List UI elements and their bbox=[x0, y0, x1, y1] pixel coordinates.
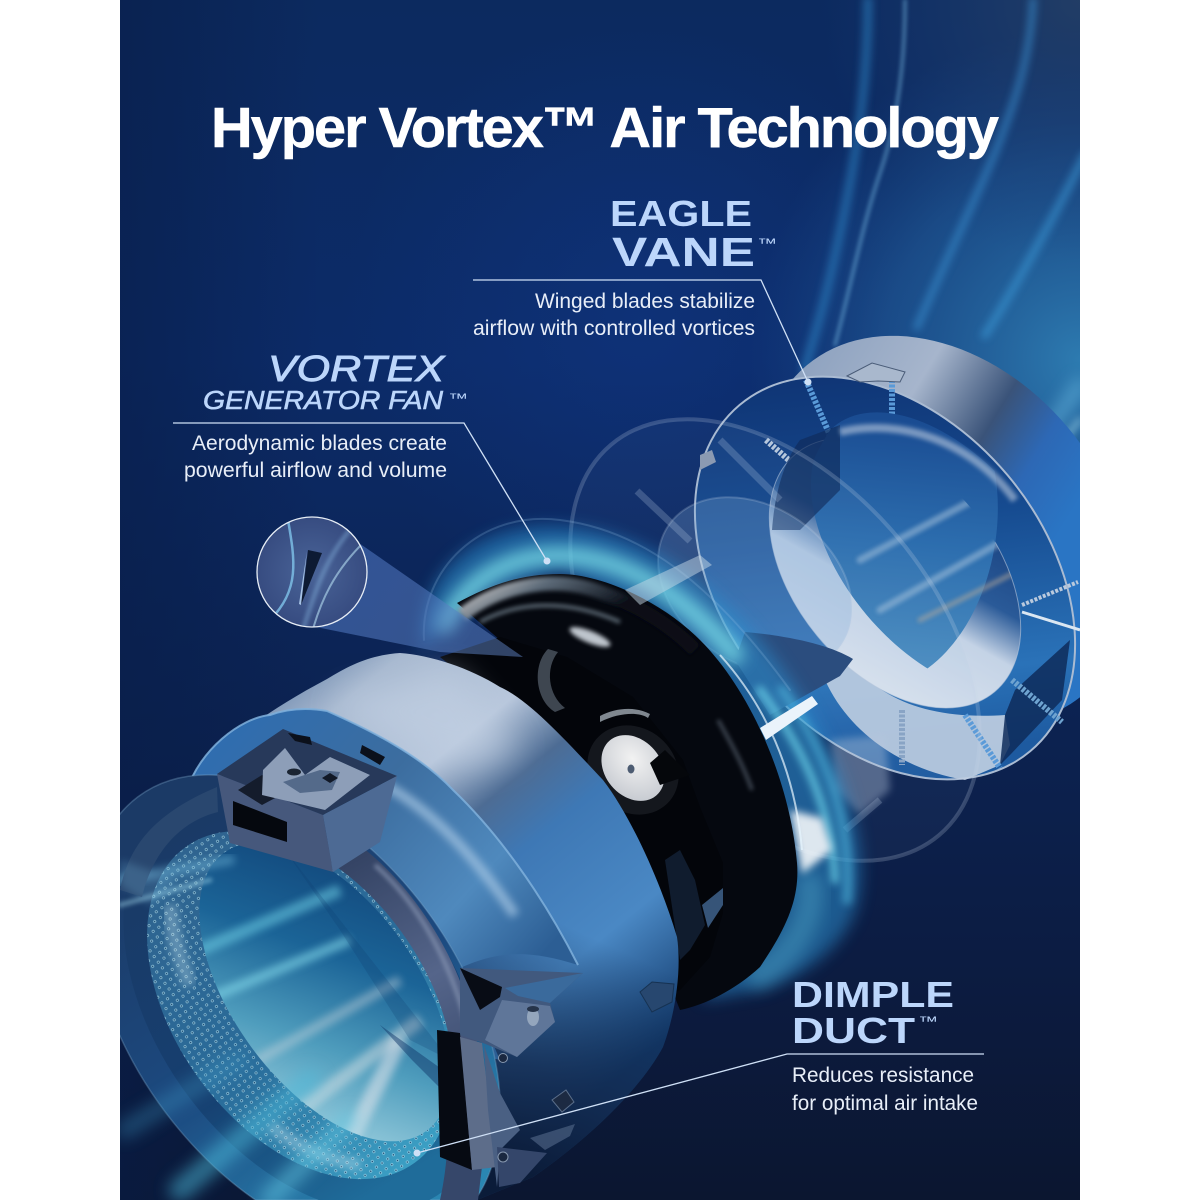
panel background gradient bbox=[120, 0, 1080, 1200]
dimple highlights bbox=[170, 905, 190, 985]
metal ring band bbox=[339, 850, 482, 1200]
inner tube opening bbox=[814, 412, 998, 668]
inner tube crescent bbox=[768, 440, 1022, 708]
lower translucent silver blade bbox=[830, 735, 890, 815]
description: vortex fan: Aerodynamic blades create bbox=[192, 431, 447, 455]
leader line: eagle vane bbox=[473, 280, 812, 386]
description: vortex fan: powerful airflow and volume bbox=[184, 458, 447, 482]
rim light line bbox=[720, 655, 802, 850]
lower silver petals bbox=[825, 660, 1010, 780]
heading: vortex generator fan bbox=[203, 348, 468, 415]
callout: vortex generator fan bbox=[173, 348, 550, 564]
translucent inner disc bbox=[657, 496, 852, 665]
mounting tab bbox=[847, 363, 905, 382]
ring highlight bbox=[373, 862, 460, 1014]
callout: dimple duct bbox=[414, 974, 984, 1156]
title: Hyper Vortex™ Air Technology bbox=[211, 96, 999, 160]
leader line: vortex fan bbox=[173, 423, 550, 564]
translucent spokes bbox=[637, 440, 880, 830]
side strut bbox=[484, 1045, 520, 1187]
small bracket bbox=[700, 450, 716, 470]
serrated blades bbox=[766, 380, 1080, 768]
tube top highlight bbox=[840, 428, 1015, 500]
gasket silver highlight bbox=[462, 584, 695, 650]
hub bbox=[588, 726, 678, 814]
black gasket ring bbox=[457, 555, 818, 1010]
left flange bracket bbox=[120, 787, 218, 905]
streaks through tube bbox=[855, 499, 1012, 624]
leader line: dimple duct bbox=[414, 1054, 984, 1156]
heading: eagle vane: EAGLE bbox=[610, 193, 752, 234]
heading: vortex generator fan: ™ bbox=[448, 390, 468, 406]
description: vortex fan bbox=[184, 431, 447, 482]
heading: eagle vane: VANE bbox=[612, 229, 755, 275]
translucent spoke strip bbox=[625, 555, 712, 605]
heading: eagle vane bbox=[610, 193, 777, 275]
rear eagle vane assembly bbox=[568, 336, 1080, 863]
white spoke strip bbox=[760, 696, 818, 740]
description: dimple duct: for optimal air intake bbox=[792, 1091, 978, 1115]
airflow wisps top right bbox=[798, 0, 1080, 437]
heading: dimple duct: DUCT bbox=[792, 1010, 915, 1051]
heading: dimple duct: DIMPLE bbox=[792, 974, 954, 1015]
airflow rays lower left bbox=[120, 860, 350, 1198]
description: dimple duct: Reduces resistance bbox=[792, 1063, 974, 1087]
small housing tab bbox=[640, 982, 674, 1012]
dark fin bbox=[735, 632, 853, 715]
description: eagle vane: airflow with controlled vortices bbox=[473, 316, 755, 340]
fan blades bbox=[538, 649, 565, 712]
heading: vortex generator fan: VORTEX bbox=[268, 348, 446, 389]
heading: dimple duct bbox=[792, 974, 954, 1051]
front flange body bbox=[187, 709, 578, 1060]
housing soft highlight bbox=[340, 670, 520, 770]
dark upper-left tube panel bbox=[772, 425, 840, 530]
pointer beam to inset bbox=[316, 541, 523, 657]
dark translucent facet bbox=[285, 850, 450, 1060]
lower black cut-out bbox=[437, 1030, 472, 1170]
vane interior bbox=[694, 376, 1076, 780]
heading: dimple duct: ™ bbox=[918, 1013, 938, 1029]
transparent front vane ring bbox=[568, 417, 982, 863]
lower bracket plate bbox=[497, 1147, 547, 1187]
description: eagle vane: Winged blades stabilize bbox=[535, 289, 755, 313]
flange gloss bbox=[385, 785, 515, 915]
duct opening with airflow streaks bbox=[149, 799, 501, 1185]
inset circle: blade detail bbox=[257, 517, 367, 640]
front housing cylinder bbox=[180, 653, 679, 1200]
description: dimple duct bbox=[792, 1063, 978, 1115]
outer vane band bbox=[793, 336, 1080, 708]
front duct outer rim bbox=[90, 775, 500, 1200]
dark lower right wedge bbox=[1000, 640, 1070, 765]
sensor housing block bbox=[217, 729, 397, 872]
dimpled duct ring bbox=[147, 831, 453, 1179]
gasket specular spot bbox=[567, 623, 613, 651]
fan interior bbox=[440, 638, 723, 960]
cyan airflow glow around gasket bbox=[421, 519, 861, 1000]
description: eagle vane bbox=[473, 289, 755, 340]
flange rim line bbox=[187, 709, 578, 965]
right bracket with screw boss bbox=[437, 968, 583, 1187]
lower ring strut bbox=[460, 1037, 497, 1170]
heading: vortex generator fan: GENERATOR FAN bbox=[203, 385, 443, 415]
callout: eagle vane bbox=[473, 193, 812, 386]
screw bosses bbox=[498, 1054, 508, 1062]
heading: eagle vane: ™ bbox=[757, 235, 777, 251]
